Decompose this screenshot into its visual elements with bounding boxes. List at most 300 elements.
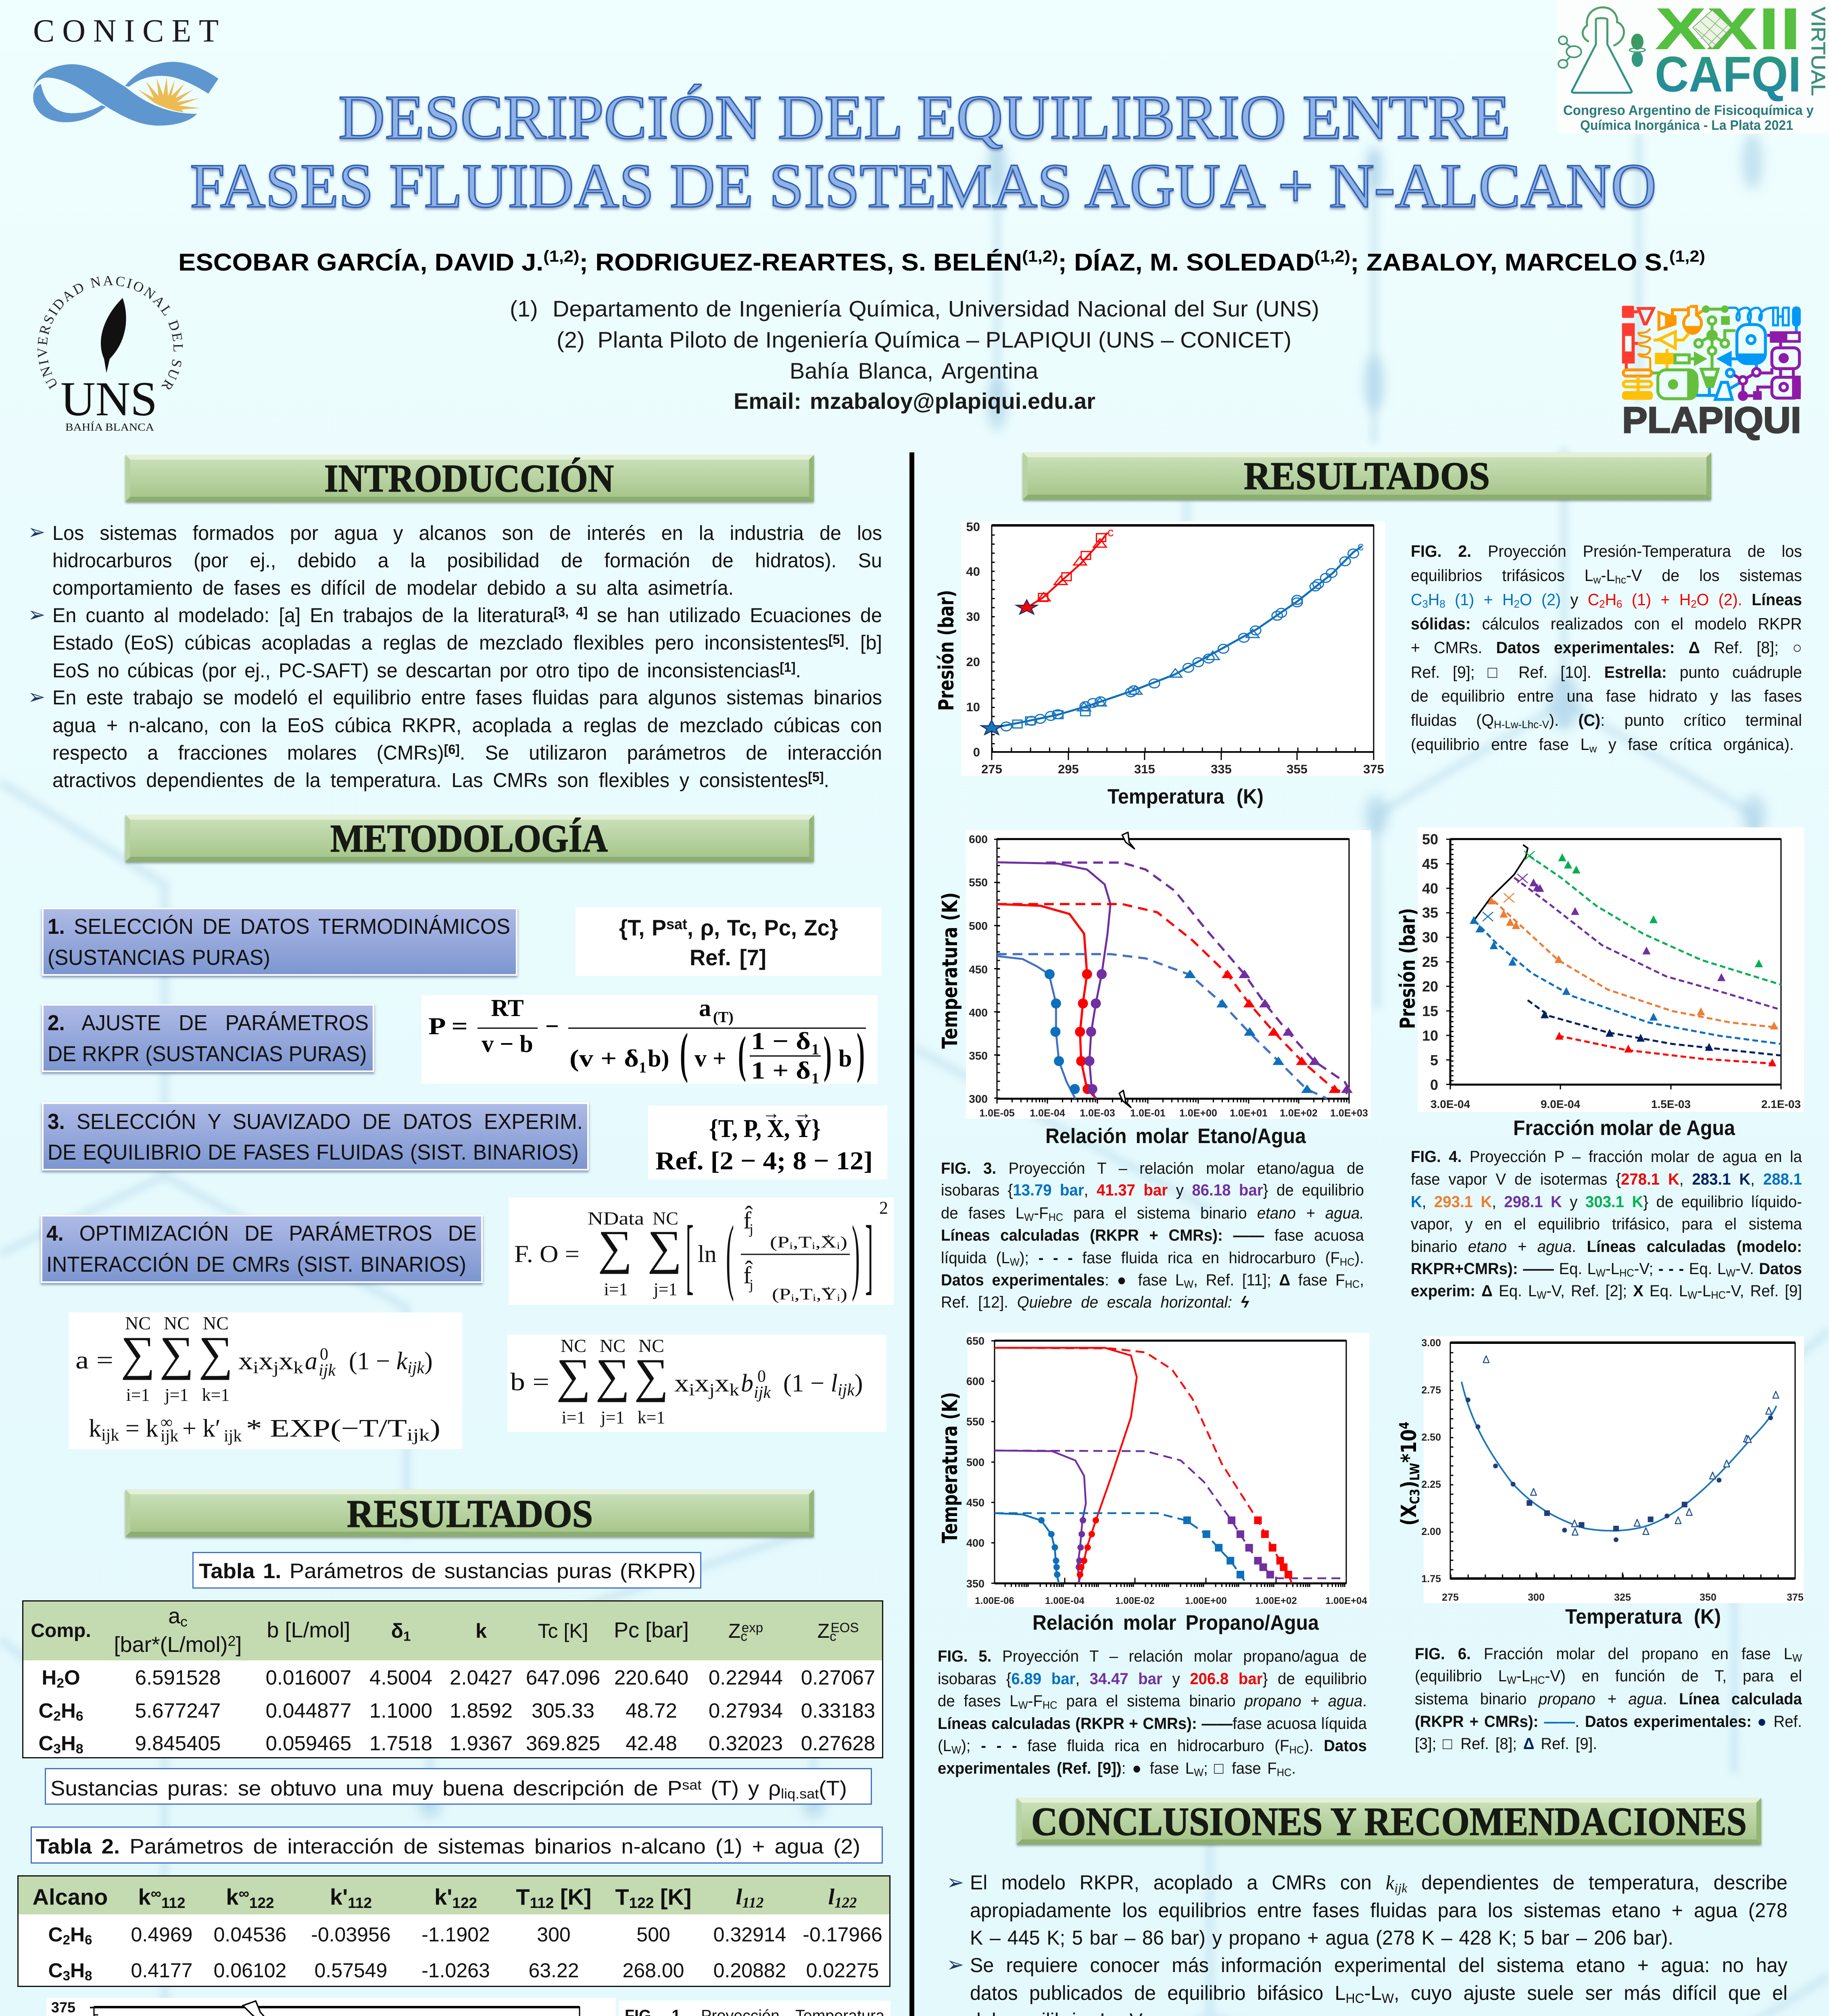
chart: figure 5: 650 [966, 1335, 984, 1347]
equation: a mixing rule: ijk [161, 1427, 178, 1445]
affiliations: Email: mzabaloy@plapiqui.edu.ar [734, 388, 1095, 414]
chart: figure 1 [13, 1998, 616, 2016]
caption: figure 2: (equilibrio entre fase Lw y fase crítica orgánica). [1411, 735, 1794, 755]
authors [178, 242, 1705, 278]
paragraph lines: hidrocarburos (por ej., debido a la posibilidad de formación de hidratos). Su [52, 549, 882, 572]
chart: figure 3: 400 [969, 1006, 988, 1019]
logo: CONICET [33, 18, 219, 127]
chart: figure 6: 300 [1528, 1592, 1545, 1603]
chart: figure 3: 1.0E+02 [1280, 1108, 1318, 1119]
table 1 row C2H6: 48.72 [626, 1699, 677, 1722]
column divider [909, 452, 914, 2016]
equation: a mixing rule [69, 1312, 462, 1449]
equation: a mixing rule: k=1 [202, 1385, 229, 1405]
equation: b mixing rule: i [689, 1381, 694, 1400]
equation: RKPR: v − b [482, 1031, 533, 1057]
chart: figure 5 [932, 1333, 1369, 1607]
step 2 box: DE RKPR (SUSTANCIAS PURAS) [48, 1042, 367, 1066]
chart: figure 6: 2.25 [1421, 1479, 1441, 1490]
chart: figure 4: 25 [1422, 954, 1438, 970]
table 1 header row: Pc [bar] [614, 1618, 689, 1642]
equation: objective function: → [819, 1279, 833, 1294]
caption: figure 2: de equilibrio entre una fase hidrato y las fases [1411, 687, 1802, 705]
caption: figure 1 [619, 2001, 891, 2016]
title [190, 85, 1656, 214]
chart: figure 3: 1.0E-05 [979, 1108, 1015, 1119]
equation: a mixing rule: ∑ [198, 1327, 233, 1380]
chart: figure 4: 10 [1422, 1027, 1438, 1044]
chart: figure 2: 20 [966, 655, 980, 669]
step 4 box: INTERACCIÓN DE CMRs (SIST. BINARIOS) [46, 1252, 466, 1277]
chart: figure 2: 375 [1363, 762, 1384, 776]
table 2 caption: Tabla 2. Parámetros de interacción de sistemas binarios n-alcano (1) + agua (2) [36, 1835, 860, 1858]
paragraph lines: datos publicados de equilibrio bifásico LHC-LW, cuyo ajuste suele ser más difícil que el [970, 1982, 1787, 2006]
equation: objective function: ∑ [647, 1220, 682, 1274]
caption: figure 4: FIG. 4. Proyección P – fracción molar de agua en la [1411, 1148, 1802, 1166]
logo: PLAPIQUI: PLAPIQUI [1622, 400, 1801, 441]
equation: a mixing rule: ∑ [159, 1327, 194, 1380]
table 1 row C3H8: 0.27628 [801, 1732, 875, 1755]
equation: RKPR: 1 [811, 1070, 819, 1087]
table 1 row C3H8: 1.9367 [450, 1732, 513, 1755]
equation: objective function: → [819, 1227, 833, 1242]
equation: b mixing rule: ∑ [595, 1349, 630, 1402]
bullet: ➢ [28, 603, 46, 627]
chart: figure 4: 3.0E-04 [1431, 1098, 1470, 1110]
equation: objective function: f̂ [743, 1261, 753, 1289]
heading: introducción [125, 455, 814, 502]
caption: figure 4: fase vapor V de isotermas {278.1 K, 283.1 K, 288.1 [1411, 1170, 1802, 1188]
chart: figure 3: 500 [969, 920, 988, 932]
equation: RKPR: P = [428, 1013, 468, 1039]
table 2 header row [19, 1876, 890, 1914]
equation: b mixing rule: 0 [757, 1367, 766, 1386]
caption: figure 2: sólidas: cálculos realizados con el modelo RKPR [1411, 614, 1802, 633]
step 1 box: (SUSTANCIAS PURAS) [48, 946, 270, 970]
chart: figure 5: 550 [966, 1416, 984, 1428]
step 3 box: 3. SELECCIÓN Y SUAVIZADO DE DATOS EXPERIM. [48, 1110, 583, 1134]
equation: b mixing rule: i=1 [561, 1408, 586, 1427]
table 1 row C3H8: 0.059465 [266, 1732, 351, 1755]
table 1 header row: k [475, 1620, 487, 1642]
table 1 header row: Tc [K] [538, 1620, 588, 1642]
equation: objective function: 2 [879, 1198, 888, 1218]
caption: figure 4 [1411, 1149, 1802, 1304]
equation: b mixing rule: ijk [754, 1383, 771, 1402]
chart: figure 2: 30 [966, 610, 980, 624]
paragraph lines: atractivos dependientes de la temperatura. Las CMRs son flexibles y consistentes[5]. [52, 769, 829, 791]
step 3 data [648, 1106, 887, 1179]
table 1 row C3H8: 9.845405 [135, 1732, 221, 1755]
table 2 row C2H6: C2H6 [48, 1923, 92, 1947]
bullet: ➢ [28, 685, 46, 709]
equation: a mixing rule: x [259, 1347, 273, 1375]
table 2 row C3H8 [19, 1950, 890, 1986]
table 1 header row: Zcexp [728, 1620, 763, 1643]
table 1 row C2H6: 0.33183 [801, 1699, 875, 1722]
table 1 row H2O [23, 1660, 882, 1693]
caption: figure 3: isobaras {13.79 bar, 41.37 bar y 86.18 bar} de equilibrio [941, 1181, 1364, 1199]
equation: a mixing rule: (1 − k [349, 1347, 407, 1375]
chart: figure 1: 375 [51, 1999, 75, 2016]
figure 6 x-axis label: Temperatura (K) [1565, 1605, 1721, 1629]
caption: figure 3: líquida (LW); - - - fase fluida rica en hidrocarburo (FHC). [941, 1249, 1364, 1268]
step 4 box: 4. OPTIMIZACIÓN DE PARÁMETROS DE [46, 1221, 477, 1245]
equation: b mixing rule: b [741, 1370, 753, 1397]
table 1 row H2O: 4.5004 [369, 1666, 432, 1689]
table 1 row C2H6: 1.8592 [450, 1699, 513, 1722]
equation: b mixing rule: j [708, 1381, 715, 1400]
chart: figure 2: c [1358, 539, 1364, 553]
chart: figure 3: 550 [969, 876, 988, 889]
chart: figure 6: 2.00 [1421, 1526, 1441, 1537]
chart: figure 2: 295 [1058, 762, 1079, 776]
equation: objective function: F. O = [514, 1241, 580, 1267]
chart: figure 3: 1.0E-03 [1080, 1108, 1115, 1119]
table 2 row C3H8: 268.00 [623, 1959, 684, 1982]
step 1 box [42, 908, 517, 976]
chart: figure 5: 500 [966, 1456, 984, 1468]
caption: figure 5: FIG. 5. Proyección T – relación molar propano/agua de [938, 1647, 1367, 1665]
equation: RKPR: ) [824, 1027, 832, 1083]
caption: figure 5: (LW); - - - fase fluida rica en hidrocarburo (FHC). Datos [938, 1737, 1367, 1756]
table 1 row H2O: H2O [42, 1666, 80, 1691]
chart: figure 4: 1.5E-03 [1651, 1098, 1691, 1110]
chart: figure 5: 600 [966, 1375, 984, 1387]
equation: a mixing rule: ∞ [161, 1413, 173, 1432]
authors: ESCOBAR GARCÍA, DAVID J. [178, 249, 515, 276]
chart: figure 4: 20 [1422, 978, 1438, 995]
logo: XXII CAFQI virtual: CAFQI [1655, 47, 1801, 102]
table 1 row C2H6 [23, 1693, 882, 1725]
chart: figure 4: 15 [1422, 1003, 1438, 1019]
logo: UNS: UNS [60, 372, 157, 426]
chart: figure 6 [1397, 1336, 1804, 1603]
equation: b mixing rule: ∑ [634, 1349, 669, 1402]
table 1 header row: δ1 [391, 1620, 411, 1643]
equation: RKPR: a [699, 995, 711, 1021]
table 1 row C3H8 [23, 1725, 882, 1757]
equation: objective function: j [749, 1221, 753, 1237]
equation: objective function: f̂ [743, 1206, 753, 1234]
chart: figure 5: 450 [966, 1497, 984, 1509]
chart: figure 2: 10 [966, 700, 980, 714]
logo: UNS: BAHÍA BLANCA [65, 421, 154, 433]
chart: figure 3 [932, 830, 1371, 1119]
chart: figure 4: 40 [1422, 880, 1438, 897]
equation: b mixing rule: x [674, 1370, 687, 1397]
step 3 data: → [762, 1103, 780, 1123]
equation: RKPR: 1 + δ [751, 1057, 811, 1084]
chart: figure 6: 350 [1700, 1592, 1716, 1603]
table 2 header row: k∞122 [226, 1884, 274, 1911]
equation: a mixing rule: a = [75, 1347, 113, 1374]
table 1 row H2O: 0.016007 [266, 1666, 351, 1689]
equation: RKPR: 1 [811, 1041, 819, 1058]
table 2 row C2H6: -0.03956 [311, 1923, 391, 1946]
chart: figure 6: LW [1407, 1463, 1422, 1481]
chart: figure 3: 1.0E+01 [1230, 1108, 1268, 1119]
authors: (1,2) [543, 248, 579, 265]
chart: figure 5: 1.00E+02 [1255, 1595, 1297, 1606]
figure 4 x-axis label: Fracción molar de Agua [1513, 1116, 1735, 1140]
equation: RKPR: (v + δ [569, 1045, 639, 1072]
equation: objective function: ) [852, 1209, 860, 1302]
figure 5 x-axis label: Relación molar Propano/Agua [1032, 1611, 1319, 1635]
chart: figure 3: 1.0E+00 [1179, 1108, 1217, 1119]
caption: figure 3: Ref. [12]. Quiebre de escala horizontal: ϟ [941, 1293, 1249, 1311]
chart: figure 2: 315 [1134, 762, 1155, 776]
chart: figure 6: C3 [1407, 1489, 1422, 1504]
table 1 row C2H6: 0.27934 [709, 1699, 783, 1722]
equation: b mixing rule: k [729, 1381, 739, 1400]
table 1 row C2H6: 0.044877 [266, 1699, 351, 1722]
chart: figure 6: 2.75 [1421, 1385, 1441, 1396]
caption: figure 4: experim: Δ Eq. LW-V, Ref. [2]; X Eq. LW-LHC-V, Ref. [9] [1411, 1282, 1802, 1301]
chart: figure 2 [936, 521, 1385, 776]
chart: figure 5: 350 [966, 1578, 984, 1590]
step 1 data: {T, Psat, ρ, Tc, Pc, Zc} [619, 915, 838, 940]
step 1 box: 1. SELECCIÓN DE DATOS TERMODINÁMICOS [48, 914, 510, 939]
heading: conclusiones: CONCLUSIONES Y RECOMENDACIONES [1031, 1799, 1747, 1844]
affiliations [510, 296, 1319, 415]
equation: objective function: j [749, 1277, 753, 1293]
logo: XXII CAFQI virtual [1557, 0, 1829, 133]
chart: figure 6: 4 [1397, 1422, 1412, 1429]
step 3 box: DE EQUILIBRIO DE FASES FLUIDAS (SIST. BINARIOS) [48, 1140, 579, 1164]
chart: figure 4: 9.0E-04 [1541, 1098, 1580, 1110]
table 1 header row: ZcEOS [818, 1620, 859, 1643]
logo: CONICET: CONICET [33, 13, 219, 49]
heading: resultados (right): RESULTADOS [1244, 454, 1490, 498]
equation: a mixing rule: ∑ [121, 1327, 155, 1380]
chart: figure 6: 275 [1442, 1592, 1459, 1603]
chart: figure 4 [1395, 827, 1804, 1112]
equation: b mixing rule: ) [855, 1370, 863, 1397]
panel: introducción text [28, 520, 882, 794]
paragraph lines [28, 520, 882, 794]
panel: conclusiones text [947, 1871, 1787, 2016]
chart: figure 6: 1.75 [1421, 1573, 1441, 1585]
equation: objective function: ] [865, 1209, 873, 1302]
caption: figure 3: Líneas calculadas (RKPR + CMRs): —— fase acuosa [941, 1227, 1364, 1244]
caption: figure 2: + CMRs. Datos experimentales: Δ Ref. [8]; ○ [1411, 638, 1802, 657]
table 2 row C3H8: 63.22 [528, 1959, 579, 1982]
table 2 header row: l122 [828, 1885, 857, 1911]
authors: ; ZABALOY, MARCELO S. [1350, 249, 1669, 276]
equation: RKPR: 1 − δ [751, 1028, 811, 1054]
chart: figure 4: 50 [1422, 831, 1438, 848]
table 2 row C3H8: 0.4177 [131, 1959, 192, 1982]
paragraph lines: EoS no cúbicas (por ej., PC-SAFT) se descartan por otro tipo de inconsistencias[1]. [52, 659, 801, 682]
chart: figure 5: 1.00E-06 [975, 1595, 1014, 1606]
equation: a mixing rule: ijk [407, 1426, 430, 1445]
chart: figure 5: 1.00E+00 [1185, 1595, 1227, 1606]
chart: figure 3: 350 [969, 1050, 988, 1062]
table 1 row C3H8: 1.7518 [369, 1732, 432, 1755]
equation: RKPR: RT [491, 995, 524, 1021]
chart: figure 4: 35 [1422, 904, 1438, 921]
heading: metodología [125, 815, 814, 862]
heading: resultados (left): RESULTADOS [347, 1492, 593, 1535]
chart: figure 3: 1.0E-04 [1030, 1108, 1065, 1119]
chart: figure 2: 0 [973, 745, 980, 759]
bullet: ➢ [947, 1870, 964, 1895]
equation: objective function: (Pᵢ,Tᵢ,Xᵢ) [770, 1233, 847, 1251]
chart: figure 6: 2.50 [1421, 1432, 1441, 1443]
equation: b mixing rule: ∑ [556, 1349, 591, 1402]
table 2 row C2H6: -0.17966 [803, 1923, 882, 1946]
equation: a mixing rule: * EXP(−T/T [246, 1415, 372, 1442]
equation: a mixing rule: i=1 [126, 1385, 150, 1405]
note: sustancias puras [45, 1768, 872, 1805]
table 1 caption: Tabla 1. Parámetros de sustancias puras (RKPR) [199, 1560, 696, 1583]
table 1 row C2H6: 1.1000 [369, 1699, 432, 1722]
table 1 row H2O: 647.096 [526, 1666, 600, 1689]
table 1 header row: ac [168, 1604, 188, 1630]
chart: figure 6: 375 [1787, 1592, 1804, 1603]
chart: figure 3: 1.0E-01 [1130, 1108, 1166, 1119]
chart: figure 6: 3.00 [1421, 1337, 1441, 1349]
caption: figure 2: Ref. [9]; □ Ref. [10]. Estrella: punto cuádruple [1411, 663, 1802, 681]
equation: a mixing rule: j [272, 1359, 279, 1377]
caption: figure 5: Líneas calculadas (RKPR + CMRs): ——fase acuosa líquida [938, 1715, 1367, 1733]
step 1 data [576, 908, 882, 976]
table 1 row C2H6: 305.33 [532, 1699, 594, 1722]
equation: objective function [509, 1198, 894, 1305]
chart: figure 3: Temperatura (K) [938, 892, 962, 1049]
figure 3 x-axis label: Relación molar Etano/Agua [1045, 1125, 1306, 1148]
equation: RKPR: v + [694, 1045, 726, 1072]
table 2 header row: k'112 [330, 1884, 372, 1911]
chart: figure 3: 1.0E+03 [1330, 1108, 1368, 1119]
caption: figure 6: sistema binario propano + agua. Línea calculada [1415, 1690, 1802, 1708]
chart: figure 2: 50 [966, 520, 980, 534]
equation: a mixing rule: NC [203, 1313, 229, 1333]
table 2 caption [31, 1826, 883, 1864]
caption: figure 4: RKPR+CMRs): —— Eq. LW-LHC-V; - - - Eq. LW-V. Datos [1411, 1260, 1802, 1279]
caption: figure 4: vapor, y en el equilibrio trifásico, para el sistema [1411, 1215, 1802, 1233]
caption: figure 2 [1411, 542, 1802, 756]
table 1 row C3H8: 369.825 [526, 1732, 600, 1755]
equation: a mixing rule: a [305, 1347, 317, 1375]
table 2 header row: k∞112 [138, 1884, 186, 1911]
paragraph lines: K – 445 K; 5 bar – 86 bar) y propano + agua (278 K – 428 K; 5 bar – 206 bar). [970, 1926, 1673, 1949]
affiliations: (1) Departamento de Ingeniería Química, Universidad Nacional del Sur (UNS) [510, 296, 1319, 321]
paragraph lines: agua + n-alcano, con la EoS cúbica RKPR, acoplada a reglas de mezclado cúbicas con [52, 714, 882, 737]
equation: objective function: NC [653, 1208, 678, 1229]
caption: figure 6: (RKPR + CMRs): ——. Datos experimentales: ● Ref. [1415, 1713, 1802, 1731]
figure 2 x-axis label: Temperatura (K) [1107, 785, 1264, 808]
table 2 row C2H6: 300 [537, 1923, 571, 1946]
equation: RKPR: ( [680, 1022, 688, 1084]
paragraph lines: comportamiento de fases es difícil de modelar debido a su alta asimetría. [52, 577, 734, 599]
equation: a mixing rule: ijk [101, 1426, 119, 1445]
equation: objective function: [ [686, 1209, 694, 1302]
table 1 header row [23, 1602, 882, 1660]
heading: introducción: INTRODUCCIÓN [324, 457, 614, 500]
equation: b mixing rule [507, 1335, 886, 1432]
equation: a mixing rule: + k′ [182, 1415, 221, 1442]
chart: figure 2: 355 [1287, 762, 1308, 776]
table 1 row C2H6: C2H6 [38, 1699, 83, 1724]
caption: figure 3 [941, 1159, 1364, 1314]
equation: b mixing rule: x [715, 1370, 729, 1397]
chart: figure 6: *10 [1397, 1429, 1421, 1463]
caption: figure 3: FIG. 3. Proyección T – relación molar etano/agua de [941, 1160, 1364, 1177]
equation: objective function: ∑ [598, 1220, 632, 1274]
equation: a mixing rule: ) [424, 1347, 433, 1375]
table 2 header row: k'122 [434, 1884, 477, 1911]
equation: a mixing rule: j=1 [164, 1385, 189, 1405]
chart: figure 4: 30 [1422, 929, 1438, 946]
caption: figure 6 [1415, 1645, 1802, 1756]
table 2 row C3H8: 0.06102 [214, 1959, 286, 1982]
equation: b mixing rule: k=1 [638, 1408, 665, 1427]
paragraph lines: respecto a fracciones molares (CMRs)[6]. Se utilizaron parámetros de interacción [52, 741, 882, 764]
equation: a mixing rule: x [279, 1347, 293, 1375]
equation: a mixing rule: ijk [319, 1361, 336, 1380]
step 2 box [42, 1004, 374, 1072]
equation: a mixing rule: NC [125, 1313, 151, 1333]
title: DESCRIPCIÓN DEL EQUILIBRIO ENTRE [338, 82, 1510, 152]
table 2 row C3H8: 0.57549 [315, 1959, 387, 1982]
step 1 data: Ref. [7] [690, 945, 766, 970]
equation: b mixing rule: NC [638, 1335, 664, 1356]
chart: figure 2: 40 [966, 564, 980, 579]
paragraph lines: En este trabajo se modeló el equilibrio entre fases fluidas para algunos sistemas binarios [52, 686, 882, 709]
table 1 row H2O: 220.640 [614, 1666, 688, 1689]
chart: figure 4: Presión (bar) [1396, 908, 1420, 1029]
equation: objective function: i=1 [604, 1279, 628, 1299]
chart: figure 4: 2.1E-03 [1761, 1098, 1801, 1110]
chart: figure 5: 400 [966, 1537, 984, 1549]
equation: a mixing rule: 0 [320, 1345, 328, 1364]
equation: objective function: ln [698, 1241, 717, 1267]
paragraph lines [947, 1871, 1787, 2016]
equation: a mixing rule: x [238, 1347, 251, 1375]
table 2 header row: T122 [K] [615, 1884, 692, 1911]
table 2 row C3H8: -1.0263 [421, 1959, 490, 1982]
equation: RKPR: ) [857, 1022, 865, 1084]
chart: figure 4: 45 [1422, 856, 1438, 872]
title: FASES FLUIDAS DE SISTEMAS AGUA + N-ALCANO [190, 151, 1656, 221]
table 2 row C3H8: 0.02275 [806, 1959, 879, 1982]
equation: RKPR: 1 [639, 1059, 647, 1076]
caption: figure 6: (equilibrio LW-LHC-V) en función de T, para el [1415, 1667, 1802, 1686]
table 1 [22, 1600, 883, 1758]
authors: ; DÍAZ, M. SOLEDAD [1058, 249, 1314, 276]
table 1 row C3H8: C3H8 [38, 1732, 83, 1756]
table 1 header row: Comp. [31, 1620, 91, 1641]
caption: figure 3: Datos experimentales: ● fase LW, Ref. [11]; Δ fase FHC, [941, 1271, 1364, 1290]
authors: (1,2) [1669, 248, 1705, 265]
equation: b mixing rule: ijk [838, 1381, 855, 1400]
equation: RKPR: ( [738, 1027, 746, 1083]
table 2 header row: Alcano [33, 1884, 108, 1910]
equation: objective function: NData [588, 1208, 644, 1229]
authors: ; RODRIGUEZ-REARTES, S. BELÉN [579, 249, 1022, 276]
table 2 [17, 1875, 891, 1987]
caption: figure 5 [938, 1647, 1367, 1780]
equation: RKPR [421, 995, 878, 1084]
equation: objective function: j=1 [653, 1279, 678, 1299]
equation: objective function: ( [726, 1209, 734, 1302]
authors: (1,2) [1314, 248, 1350, 265]
caption: figure 5: isobaras {6.89 bar, 34.47 bar y 206.8 bar} de equilibrio [938, 1670, 1367, 1688]
bullet: ➢ [28, 520, 46, 544]
paragraph lines: El modelo RKPR, acoplado a CMRs con kijk dependientes de temperatura, describe [970, 1871, 1787, 1895]
